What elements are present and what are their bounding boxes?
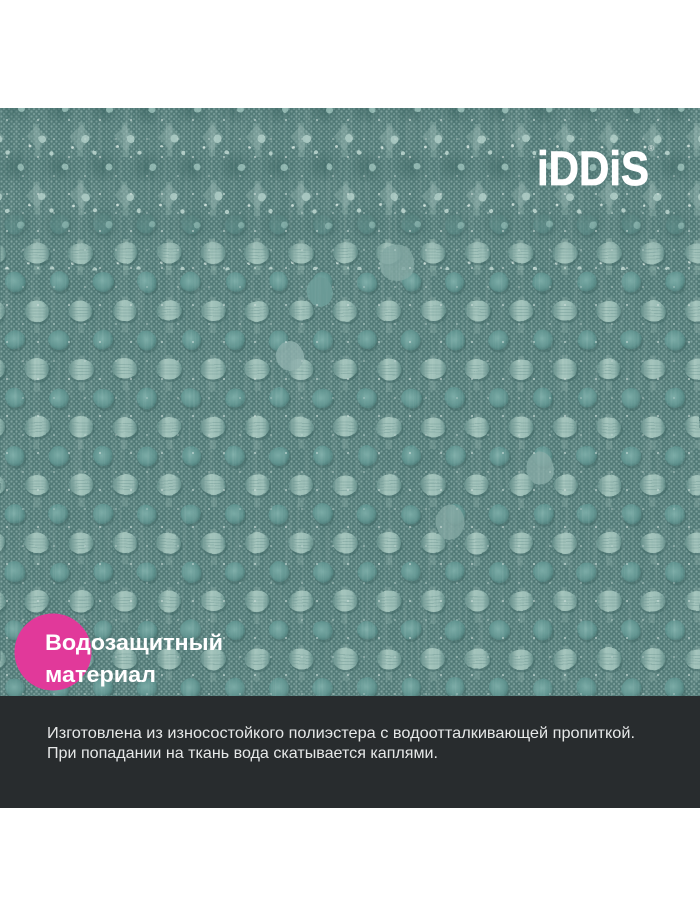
brand logo: iDDiS (537, 143, 649, 196)
pink circle accent (14, 614, 92, 690)
heading: waterproof material: материал (45, 662, 156, 687)
description text: Изготовлена из износостойкого полиэстера с водоотталкивающей пропиткой. (47, 725, 635, 742)
infographic canvas (0, 108, 700, 808)
brand logo: ® (648, 144, 654, 153)
photo: water beads on fabric (0, 100, 700, 700)
dark description band (0, 696, 700, 808)
description text: При попадании на ткань вода скатывается каплями. (47, 745, 438, 762)
heading: waterproof material: Водозащитный (45, 630, 223, 655)
